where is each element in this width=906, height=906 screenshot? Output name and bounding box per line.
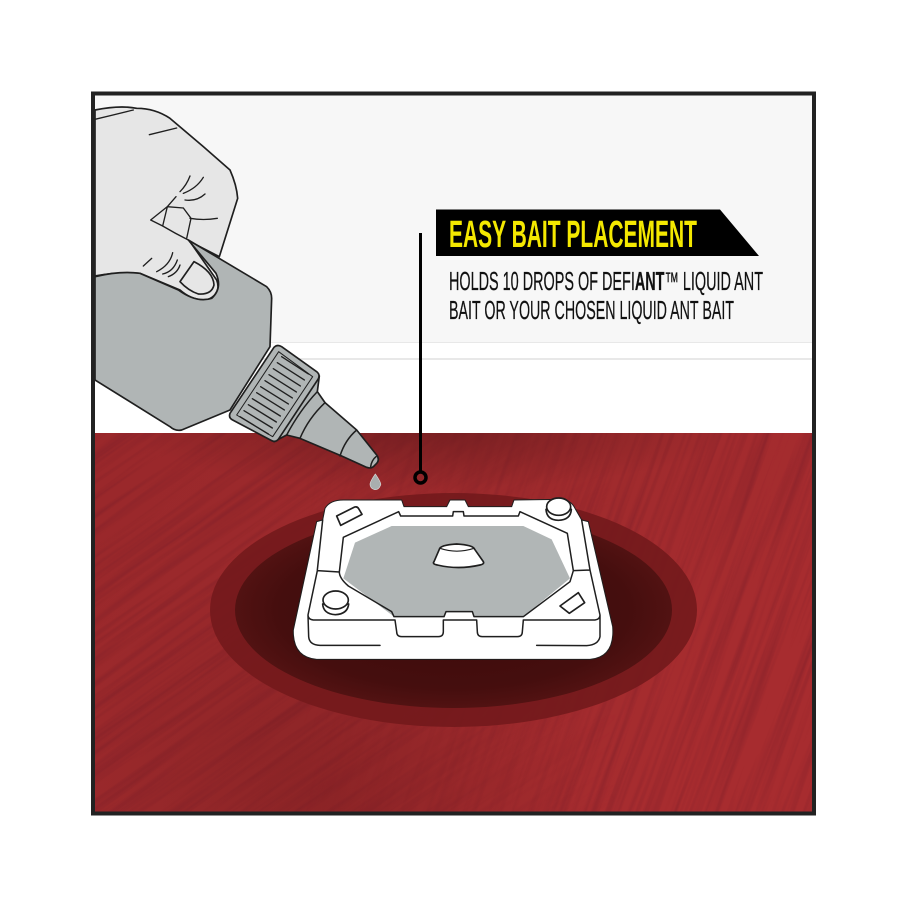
- tray moulded lines: [308, 512, 600, 646]
- bottle body: [95, 240, 272, 430]
- heading banner: [436, 210, 759, 256]
- cap ribs: [240, 357, 308, 434]
- heading text: EASY BAIT PLACEMENT: [449, 214, 697, 256]
- peg: bottom left: [323, 591, 349, 615]
- bottle nozzle: [274, 376, 378, 468]
- slot: top left: [337, 507, 362, 525]
- finger creases: [95, 110, 217, 277]
- frame: [93, 94, 814, 814]
- peg: top right: [546, 498, 571, 520]
- shadow: outer ellipse: [210, 493, 697, 727]
- nozzle bands: [287, 392, 376, 467]
- infographic: [91, 92, 816, 816]
- tray body: [293, 499, 613, 659]
- icon: bait tray: [293, 498, 613, 659]
- description text: [449, 268, 763, 325]
- center post: [433, 544, 484, 567]
- pointer line with ring: [415, 233, 426, 483]
- bait well: [343, 526, 570, 617]
- panel: red wood surface: [95, 433, 813, 812]
- panel: wall background: [95, 95, 813, 433]
- cap inner edge: [237, 352, 313, 437]
- slot: bottom right: [560, 593, 585, 613]
- shadow: inner ellipse: [235, 512, 672, 708]
- bottle cap: [230, 345, 319, 441]
- icon: hand holding bottle: [95, 107, 381, 490]
- thumb: [180, 262, 214, 294]
- liquid drop: [370, 474, 381, 490]
- hand: [95, 107, 238, 300]
- description text: HOLDS 10 DROPS OF DEFIANT™ LIQUID ANT: [449, 268, 763, 296]
